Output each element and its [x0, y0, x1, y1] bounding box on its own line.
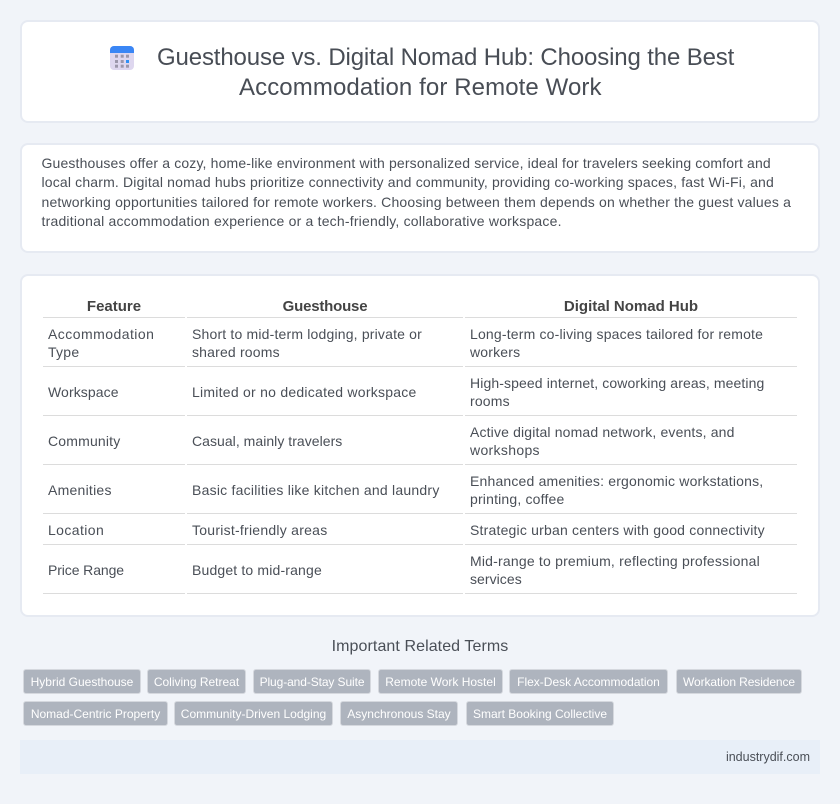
row: price range: services [470, 571, 522, 587]
row: accommodation type: Accommodation [48, 326, 154, 342]
panel: introduction [20, 143, 820, 253]
row: accommodation type: shared rooms [192, 344, 280, 360]
intro text: networking opportunities tailored for remote workers. Choosing between them depends on whether the guest values a [42, 194, 791, 210]
related term tags: Community-Driven Lodging [181, 707, 326, 721]
row: price range: Mid-range to premium, reflecting professional [470, 553, 760, 569]
related term tags [23, 669, 802, 726]
table header row: Feature [87, 298, 141, 315]
related term tags: Flex-Desk Accommodation [517, 675, 660, 689]
footer bar [20, 740, 820, 774]
intro text: traditional accommodation experience or a tech-friendly, collaborative workspace. [42, 213, 562, 229]
table header row [43, 298, 797, 318]
icon: calendar [110, 46, 134, 70]
row: community: Casual, mainly travelers [192, 433, 342, 449]
heading: related terms: Important Related Terms [332, 638, 508, 655]
footer source text: industrydif.com [726, 750, 810, 764]
intro text [42, 155, 791, 229]
related term tags: Smart Booking Collective [473, 707, 607, 721]
row: workspace: rooms [470, 393, 510, 409]
row: location: Strategic urban centers with good connectivity [470, 522, 765, 538]
row: location: Tourist-friendly areas [192, 522, 327, 538]
related term tags: Workation Residence [683, 675, 795, 689]
panel: header [20, 20, 820, 123]
row: amenities: printing, coffee [470, 491, 564, 507]
row: amenities [43, 473, 797, 514]
title [157, 44, 734, 101]
row: community: Active digital nomad network, events, and [470, 424, 735, 440]
row: amenities: Amenities [48, 482, 112, 498]
comparison table [43, 298, 797, 594]
intro text: local charm. Digital nomad hubs prioritize connectivity and community, providing co-working spaces, fast Wi-Fi, and [42, 174, 774, 190]
intro text: Guesthouses offer a cozy, home-like environment with personalized service, ideal for travelers seeking comfort and [42, 155, 771, 171]
row: accommodation type: Type [48, 344, 79, 360]
row: price range: Budget to mid-range [192, 562, 322, 578]
related term tags: Nomad-Centric Property [31, 707, 160, 721]
row: accommodation type: Long-term co-living spaces tailored for remote [470, 326, 763, 342]
row: community: Community [48, 433, 120, 449]
table header row: Digital Nomad Hub [564, 298, 698, 315]
row: workspace: Workspace [48, 384, 119, 400]
related term tags: Plug-and-Stay Suite [260, 675, 364, 689]
row: accommodation type: Short to mid-term lodging, private or [192, 326, 422, 342]
table header row: Guesthouse [283, 298, 367, 315]
row: accommodation type: workers [470, 344, 520, 360]
row: location [43, 522, 797, 545]
row: community [43, 424, 797, 465]
row: community: workshops [470, 442, 540, 458]
related term tags: Hybrid Guesthouse [31, 675, 133, 689]
row: price range [43, 553, 797, 594]
related term tags: Remote Work Hostel [385, 675, 496, 689]
row: amenities: Basic facilities like kitchen and laundry [192, 482, 440, 498]
title: Accommodation for Remote Work [239, 74, 602, 101]
title: Guesthouse vs. Digital Nomad Hub: Choosing the Best [157, 44, 734, 71]
row: location: Location [48, 522, 104, 538]
row: amenities: Enhanced amenities: ergonomic workstations, [470, 473, 763, 489]
row: workspace: Limited or no dedicated workspace [192, 384, 417, 400]
row: workspace [43, 375, 797, 416]
row: workspace: High-speed internet, coworking areas, meeting [470, 375, 764, 391]
row: price range: Price Range [48, 562, 124, 578]
related term tags: Asynchronous Stay [347, 707, 451, 721]
related term tags: Coliving Retreat [154, 675, 239, 689]
row: accommodation type [43, 326, 797, 367]
panel: comparison table [20, 274, 820, 617]
